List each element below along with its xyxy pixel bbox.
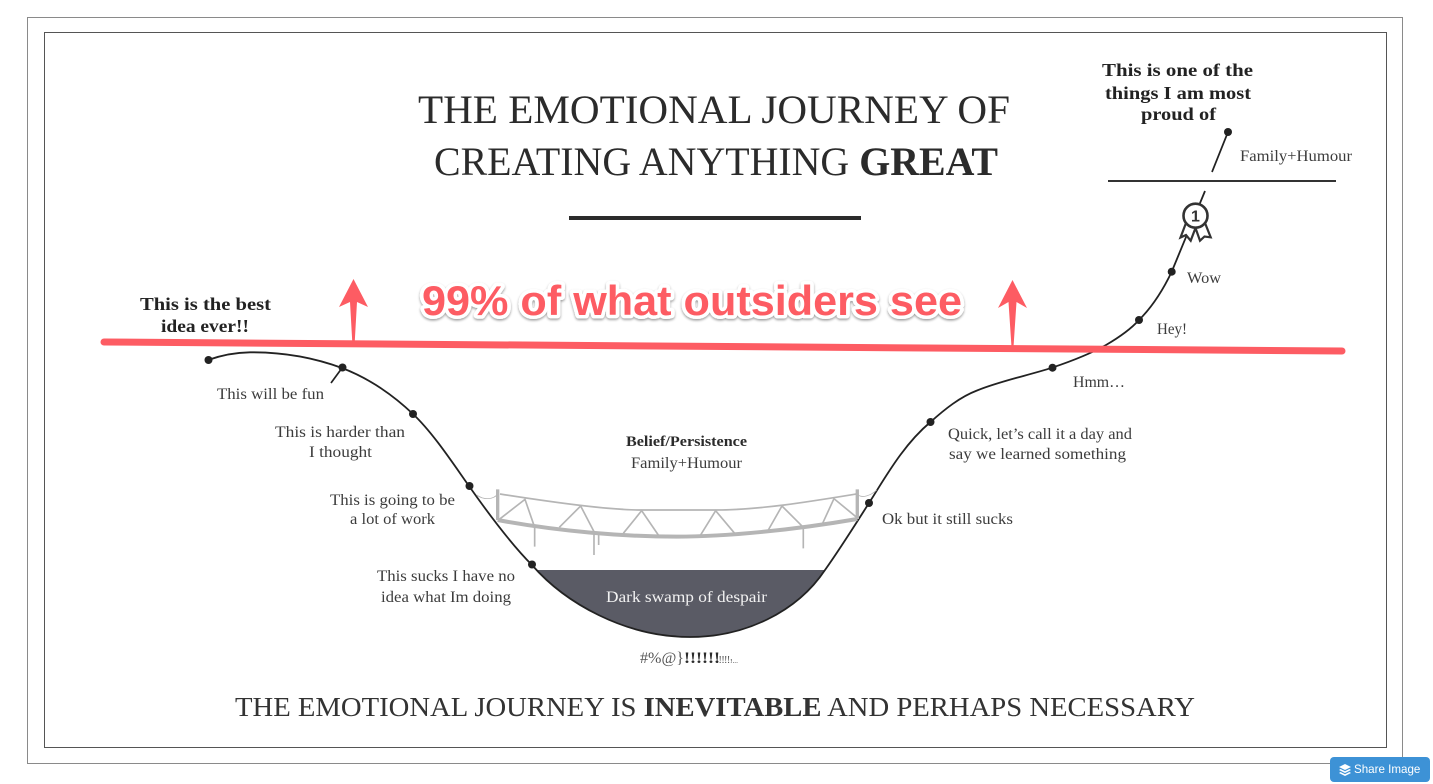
proud label: proud of	[1141, 104, 1217, 124]
curve labels: This is going to be	[330, 492, 455, 509]
curve labels: I thought	[309, 444, 373, 461]
belief label	[626, 434, 747, 472]
red outsiders line	[104, 342, 1342, 351]
title: CREATING ANYTHING GREAT	[434, 139, 998, 184]
curve labels: This sucks I have no	[377, 568, 515, 585]
swear text: #%@}	[640, 650, 684, 667]
swamp of despair	[532, 565, 825, 637]
best idea label: This is the best	[140, 294, 271, 314]
red arrow right	[998, 280, 1027, 347]
curve labels: Wow	[1187, 270, 1222, 287]
proud label: This is one of the	[1102, 60, 1253, 80]
share button	[1330, 757, 1430, 782]
outsiders callout: 99% of what outsiders see	[422, 277, 962, 324]
curve labels: This will be fun	[217, 386, 324, 403]
swamp of despair: Dark swamp of despair	[606, 589, 768, 606]
share button: Share Image	[1354, 763, 1420, 776]
journey curve	[208, 191, 1205, 637]
proud label	[1102, 60, 1253, 124]
title	[418, 87, 1010, 184]
icon: award ribbon: 1	[1191, 208, 1200, 226]
curve labels: Ok but it still sucks	[882, 511, 1013, 528]
curve labels: Hey!	[1157, 321, 1187, 338]
curve labels: idea what Im doing	[381, 589, 511, 606]
swear text	[640, 650, 739, 667]
title underline	[569, 216, 861, 220]
swear text: !!!!!!	[684, 650, 720, 667]
best idea label	[140, 294, 271, 336]
curve points	[204, 128, 1232, 568]
bottom tagline: THE EMOTIONAL JOURNEY IS INEVITABLE AND PERHAPS NECESSARY	[235, 692, 1195, 722]
curve labels: This is harder than	[275, 424, 405, 441]
top divider line	[1108, 180, 1336, 182]
icon: award ribbon	[1180, 204, 1211, 241]
swear text: !...	[730, 659, 739, 665]
title: THE EMOTIONAL JOURNEY OF	[418, 87, 1010, 132]
belief label: Belief/Persistence	[626, 434, 747, 450]
family humour label: Family+Humour	[1240, 148, 1353, 165]
curve labels: Hmm…	[1073, 374, 1125, 391]
belief label: Family+Humour	[631, 455, 743, 472]
curve labels: Quick, let’s call it a day and	[948, 426, 1132, 443]
best idea label: idea ever!!	[161, 316, 249, 336]
swear text: !!!!!	[716, 655, 730, 666]
bridge	[477, 489, 877, 555]
proud label: things I am most	[1105, 83, 1251, 103]
curve labels: say we learned something	[949, 446, 1126, 463]
curve labels	[217, 270, 1222, 606]
curve labels: a lot of work	[350, 511, 435, 528]
red arrow left	[339, 279, 368, 346]
